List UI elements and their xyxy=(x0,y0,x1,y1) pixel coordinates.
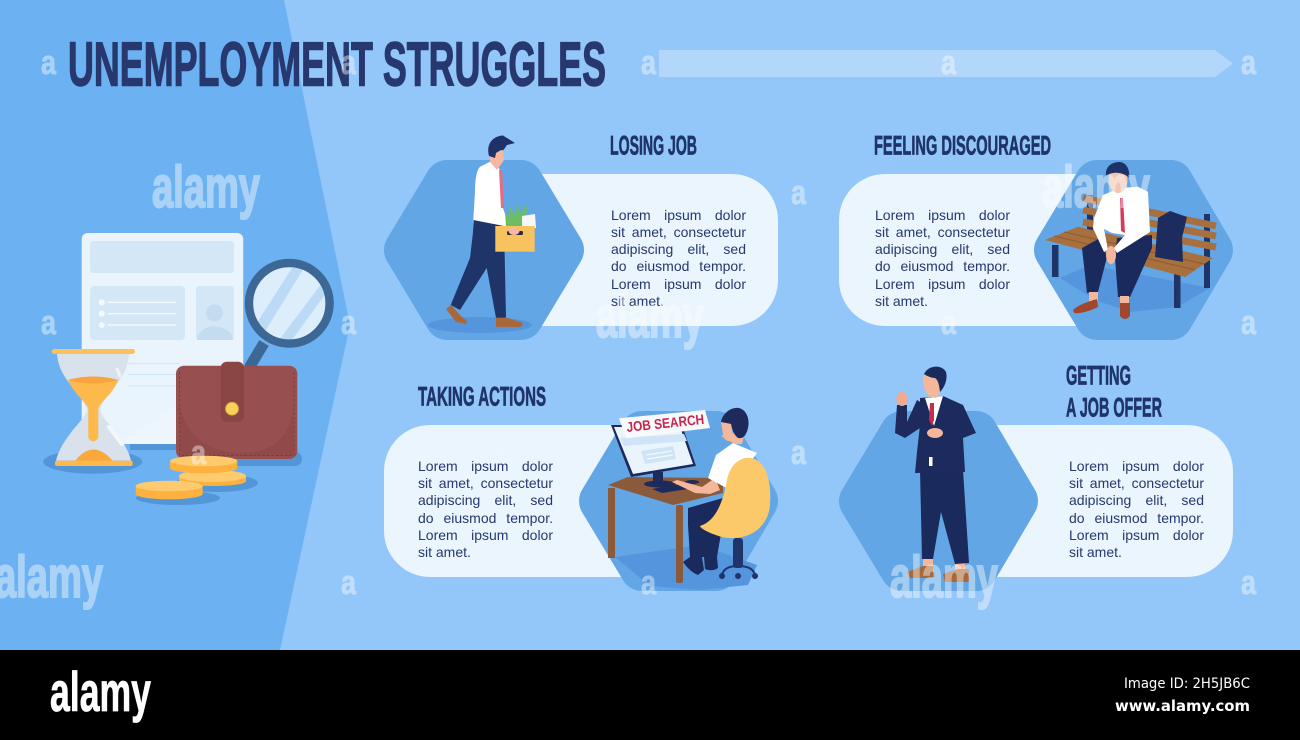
text block: taking actions xyxy=(418,458,553,560)
icon: hourglass xyxy=(43,349,142,474)
text block: feeling discouraged: Lorem ipsum dolor xyxy=(875,207,1010,223)
figure: man carrying box xyxy=(428,136,536,333)
card xyxy=(384,425,678,577)
text block: losing job: Lorem ipsum dolor xyxy=(611,207,746,223)
stock photo watermarks: a xyxy=(641,44,657,82)
text block: getting a job offer: Lorem ipsum dolor xyxy=(1069,458,1204,474)
heading: FEELING DISCOURAGED xyxy=(874,131,1051,161)
bottom black credit bar xyxy=(0,650,1300,740)
stock photo watermarks: alamy xyxy=(596,285,704,350)
stock photo watermarks: a xyxy=(941,304,957,342)
text block: feeling discouraged: sit amet. xyxy=(875,293,928,309)
text block: taking actions: sit amet, consectetur xyxy=(418,475,553,491)
hexagon backdrop xyxy=(406,182,562,318)
text block: feeling discouraged xyxy=(875,207,1010,309)
text block: getting a job offer xyxy=(1069,458,1204,560)
stock photo watermarks: a xyxy=(1091,434,1107,472)
card xyxy=(839,174,1133,326)
stock photo watermarks: a xyxy=(341,44,357,82)
text block: losing job: Lorem ipsum dolor xyxy=(611,276,746,292)
stock photo watermarks: a xyxy=(1241,564,1257,602)
stock photo watermarks: a xyxy=(341,304,357,342)
text block: taking actions: do eiusmod tempor. xyxy=(418,510,553,526)
panel: getting a job offer xyxy=(861,361,1233,582)
text block: feeling discouraged: sit amet, consectetur xyxy=(875,224,1010,240)
arrow: timeline header arrow xyxy=(659,50,1233,77)
title: UNEMPLOYMENT STRUGGLES xyxy=(68,30,606,100)
panel: feeling discouraged xyxy=(839,131,1216,326)
heading: GETTING xyxy=(1066,361,1131,391)
stock photo watermarks: a xyxy=(191,434,207,472)
stock photo watermarks: a xyxy=(791,174,807,212)
text block: getting a job offer: sit amet, consectetur xyxy=(1069,475,1204,491)
text block: losing job: sit amet, consectetur xyxy=(611,224,746,240)
stock photo watermarks: a xyxy=(341,564,357,602)
text block: losing job: do eiusmod tempor. xyxy=(611,258,746,274)
stock photo watermarks: alamy xyxy=(152,155,260,220)
icon: magnifying glass xyxy=(249,263,330,368)
stock photo watermarks: a xyxy=(41,44,57,82)
stock photo watermarks: a xyxy=(941,44,957,82)
stock photo watermarks: alamy xyxy=(890,545,998,610)
text block: losing job: adipiscing elit, sed xyxy=(611,241,746,257)
text block: taking actions: Lorem ipsum dolor xyxy=(418,458,553,474)
text block: losing job xyxy=(611,207,746,309)
figure: person at desk searching for job xyxy=(608,408,770,590)
image id: Image ID: 2H5JB6C xyxy=(1124,676,1250,692)
card xyxy=(484,174,778,326)
hexagon backdrop xyxy=(861,433,1016,569)
stock photo watermarks: a xyxy=(491,434,507,472)
stock photo watermarks: a xyxy=(791,434,807,472)
text block: getting a job offer: Lorem ipsum dolor xyxy=(1069,527,1204,543)
text block: getting a job offer: sit amet. xyxy=(1069,544,1122,560)
stock photo watermarks: a xyxy=(41,304,57,342)
heading: TAKING ACTIONS xyxy=(418,382,546,412)
panel: taking actions xyxy=(384,382,770,590)
figure: man sitting on bench xyxy=(1045,162,1216,319)
hexagon backdrop xyxy=(1056,182,1211,318)
document shadow strip xyxy=(130,444,180,450)
heading: A JOB OFFER xyxy=(1066,393,1162,423)
logo: alamy xyxy=(50,660,151,723)
text block: taking actions: adipiscing elit, sed xyxy=(418,492,553,508)
card xyxy=(939,425,1233,577)
heading xyxy=(1066,361,1162,423)
heading: LOSING JOB xyxy=(610,130,697,160)
text block: feeling discouraged: do eiusmod tempor. xyxy=(875,258,1010,274)
text block: taking actions: sit amet. xyxy=(418,544,471,560)
stock photo watermarks: a xyxy=(1241,304,1257,342)
icon: wallet xyxy=(176,362,302,466)
illustration: job search still life xyxy=(43,233,330,505)
hexagon backdrop xyxy=(601,433,756,569)
job search label: JOB SEARCH xyxy=(626,411,705,435)
text block: getting a job offer: do eiusmod tempor. xyxy=(1069,510,1204,526)
stock photo watermarks: a xyxy=(1241,44,1257,82)
text block: feeling discouraged: Lorem ipsum dolor xyxy=(875,276,1010,292)
figure: happy man in suit xyxy=(895,367,976,582)
panel: left darker arrow-shaped panel xyxy=(0,0,350,650)
site url: www.alamy.com xyxy=(1115,697,1250,715)
stock photo watermarks: alamy xyxy=(1042,155,1150,220)
text block: taking actions: Lorem ipsum dolor xyxy=(418,527,553,543)
text block: getting a job offer: adipiscing elit, sed xyxy=(1069,492,1204,508)
icon: resume document xyxy=(82,233,243,444)
panel: losing job xyxy=(406,130,778,333)
text block: feeling discouraged: adipiscing elit, sed xyxy=(875,241,1010,257)
stock photo watermarks: a xyxy=(641,564,657,602)
icon: gold coins xyxy=(136,456,258,505)
text block: losing job: sit amet. xyxy=(611,293,664,309)
